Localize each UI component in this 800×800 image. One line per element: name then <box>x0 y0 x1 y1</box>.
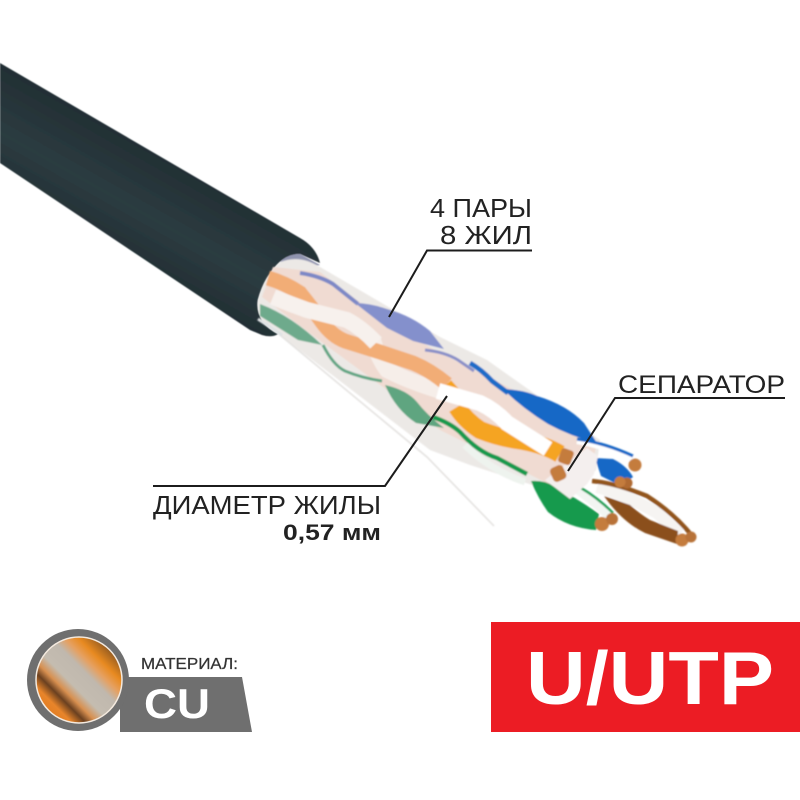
leader line: 4 pairs <box>389 250 532 317</box>
icon: copper cross-section <box>27 629 129 731</box>
cable opening lining <box>280 254 320 270</box>
badge: U/UTP <box>491 622 800 732</box>
pink separator core <box>262 267 596 492</box>
cable jacket <box>0 63 320 336</box>
badge: material copper <box>27 629 252 732</box>
sheath outer edge line <box>266 322 494 526</box>
exposed wire bundle <box>258 259 696 546</box>
material value: CU <box>144 680 210 727</box>
label: 4 pairs 8 wires <box>430 193 532 250</box>
label: 4 pairs 8 wires: 4 ПАРЫ <box>430 193 532 223</box>
badge: U/UTP: U/UTP <box>526 636 774 720</box>
orange wire <box>268 278 560 454</box>
label: core diameter: 0,57 мм <box>283 520 381 545</box>
label: core diameter <box>153 490 381 545</box>
copper conductors <box>549 447 696 546</box>
white wire, under-orange section <box>373 340 447 393</box>
label: separator: СЕПАРАТОР <box>618 371 785 399</box>
jacket-side silver highlight <box>258 319 282 335</box>
leader line: core diameter <box>153 396 447 486</box>
white wire <box>273 297 548 449</box>
label: core diameter: ДИАМЕТР ЖИЛЫ <box>153 490 381 520</box>
brown pair <box>592 481 693 544</box>
translucent sheath <box>258 259 600 497</box>
material label: МАТЕРИАЛ: <box>141 656 238 673</box>
blue pair <box>300 273 633 486</box>
green pair <box>260 304 613 530</box>
white separator tip <box>545 448 598 499</box>
leader line: separator <box>568 398 785 471</box>
label: 4 pairs 8 wires: 8 ЖИЛ <box>440 220 532 250</box>
